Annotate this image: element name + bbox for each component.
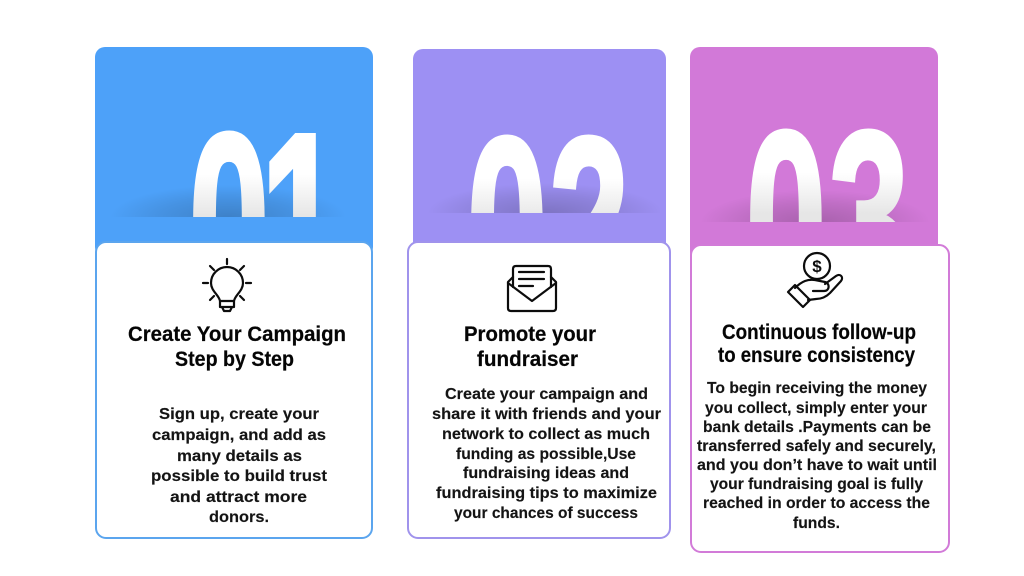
heading: Promote your [464,323,596,346]
white card [691,245,949,552]
number 03 [720,128,910,222]
body text: Create your campaign and [445,386,648,403]
white card [408,242,670,538]
body text: and you don’t have to wait until [697,457,937,474]
icon: light bulb [203,259,251,311]
body text: and attract more [170,489,307,506]
number 03: 0 [746,80,826,354]
heading: Step by Step [175,348,294,371]
body text: donors. [209,509,269,526]
heading: to ensure consistency [718,344,915,367]
body text: Sign up, create your [159,406,319,423]
number 01: 0 [189,82,269,356]
icon: hand holding coin: $ [812,257,822,276]
body text: reached in order to access the [703,495,930,512]
body text: transferred safely and securely, [697,438,936,455]
pink header block [690,47,938,262]
number 01: 1 [261,82,341,356]
body text [432,386,661,522]
panel: step 1 [95,47,373,538]
body text: fundraising ideas and [463,465,629,482]
body text: your fundraising goal is fully [710,476,923,493]
panel: step 3 [690,47,949,552]
number 03: 3 [829,80,909,354]
number 01 [128,130,328,217]
number 02 [446,134,644,213]
body text: fundraising tips to maximize [436,485,657,502]
heading: fundraiser [477,348,578,371]
heading: Create Your Campaign [128,323,346,346]
heading [128,323,346,371]
body text [151,406,328,526]
body text: funding as possible,Use [456,446,636,463]
body text: many details as [177,448,302,465]
heading [718,321,916,367]
body text: you collect, simply enter your [705,400,927,417]
panel: step 2 [408,49,670,538]
blue header block [95,47,373,257]
body text: share it with friends and your [432,406,661,423]
purple header block [413,49,666,259]
white card [96,242,372,538]
body text [697,380,937,532]
icon: open envelope [508,266,556,311]
number 02: 0 [467,86,547,360]
heading [464,323,596,371]
body text: bank details .Payments can be [703,419,931,436]
heading: Continuous follow-up [722,321,916,344]
body text: possible to build trust [151,468,328,485]
number 02: 2 [549,86,629,360]
body text: funds. [793,515,840,532]
body text: network to collect as much [442,426,650,443]
icon: hand holding coin [788,253,842,307]
body text: To begin receiving the money [707,380,927,397]
body text: your chances of success [454,505,638,522]
body text: campaign, and add as [152,427,326,444]
